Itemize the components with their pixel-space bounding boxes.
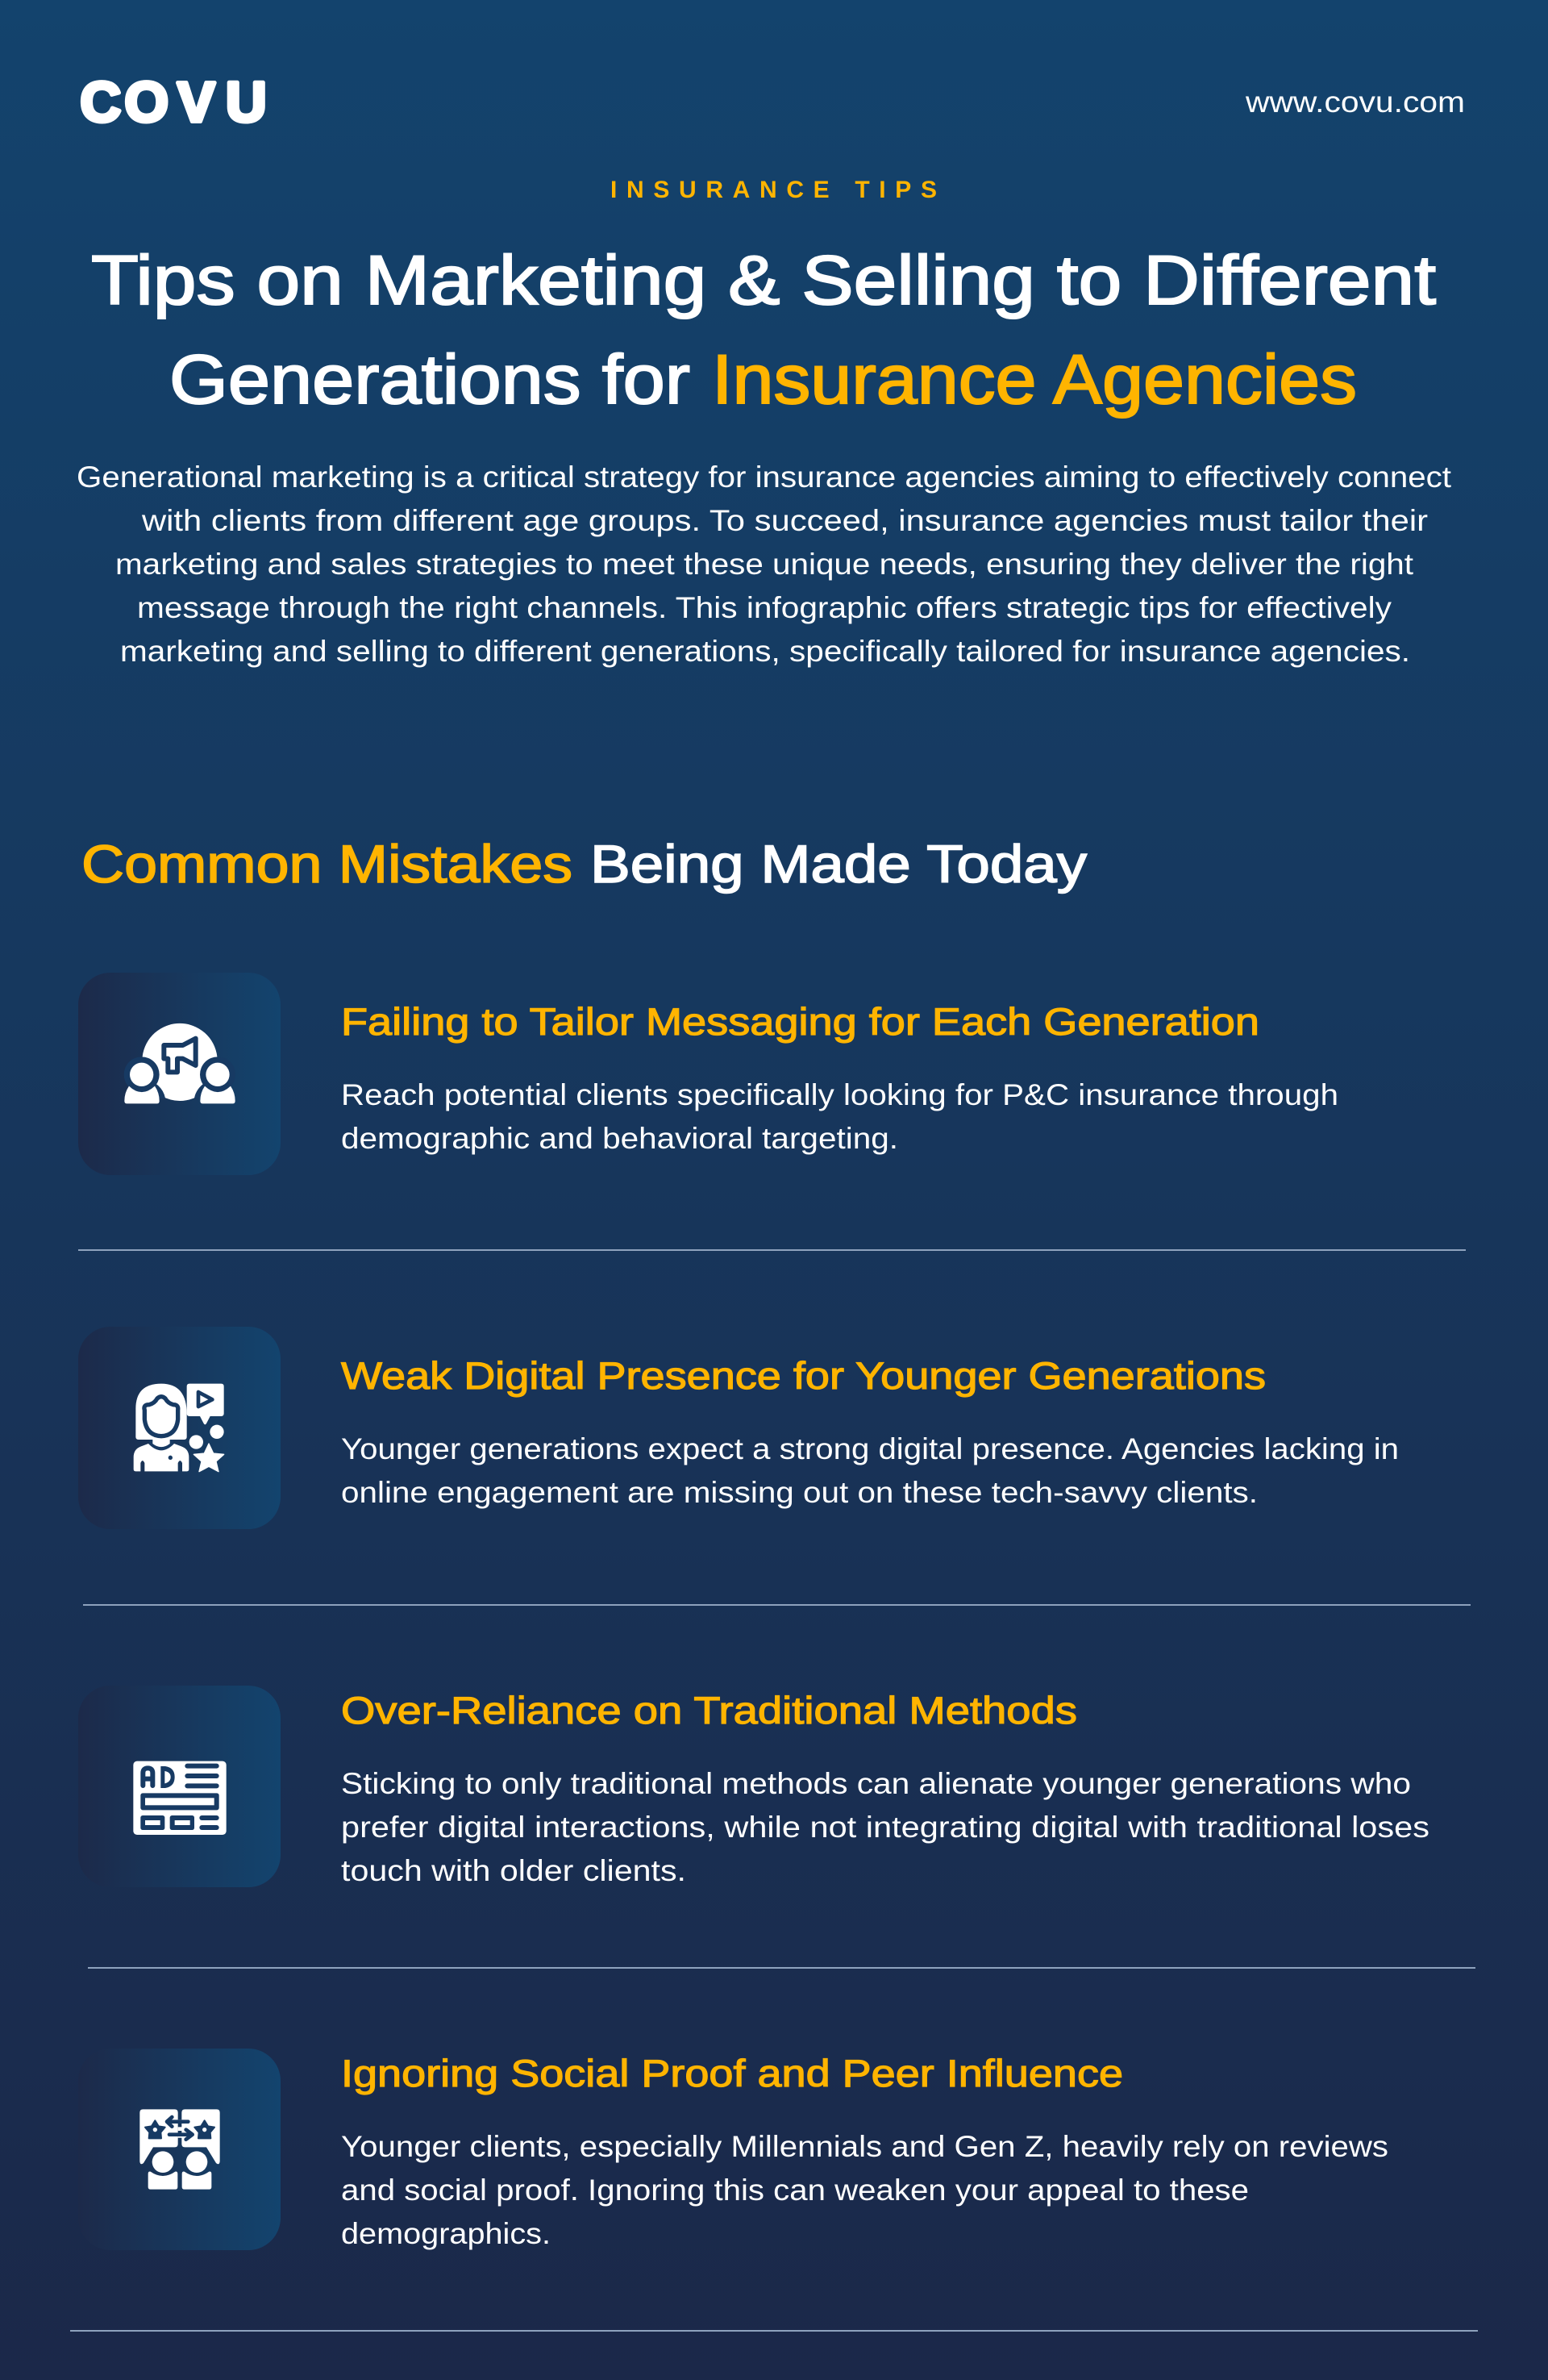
description: Younger generations expect a strong digital presence. Agencies lacking in [341,1432,1399,1465]
website url: www.covu.com [1245,85,1465,119]
kicker: insurance tips: INSURANCE TIPS [610,177,937,203]
panel: mistake 3 [78,1686,1429,1887]
title: Generations for [169,341,690,419]
description: online engagement are missing out on these tech-savvy clients. [341,1476,1258,1509]
intro paragraph: Generational marketing is a critical strategy for insurance agencies aiming to effectively connect [77,461,1452,494]
logo: COVU: COVU [81,71,267,134]
title [91,242,1436,419]
panel: mistake 2 [78,1327,1399,1529]
description: prefer digital interactions, while not integrating digital with traditional loses [341,1811,1429,1844]
description: touch with older clients. [341,1854,686,1887]
intro paragraph: message through the right channels. This infographic offers strategic tips for effectively [137,591,1392,624]
heading: Failing to Tailor Messaging for Each Generation [341,1000,1259,1043]
heading: Over-Reliance on Traditional Methods [341,1689,1077,1732]
title: Insurance Agencies [712,341,1357,419]
description: and social proof. Ignoring this can weaken your appeal to these [341,2174,1249,2207]
title: Tips on Marketing & Selling to Different [91,242,1436,319]
intro paragraph [77,461,1452,668]
description [341,1078,1338,1155]
section heading: Being Made Today [590,834,1087,894]
intro paragraph: marketing and sales strategies to meet these unique needs, ensuring they deliver the right [115,548,1414,581]
description: Sticking to only traditional methods can alienate younger generations who [341,1767,1411,1800]
panel: mistake 1 [78,973,1338,1175]
description: Reach potential clients specifically looking for P&C insurance through [341,1078,1338,1111]
intro paragraph: marketing and selling to different generations, specifically tailored for insurance agencies. [120,635,1410,668]
icon: ad layout [78,1686,281,1887]
panel: mistake 4 [78,2049,1388,2250]
icon: audience and megaphone [78,973,281,1175]
heading: Ignoring Social Proof and Peer Influence [341,2052,1123,2094]
description: Younger clients, especially Millennials and Gen Z, heavily rely on reviews [341,2130,1388,2163]
intro paragraph: with clients from different age groups. To succeed, insurance agencies must tailor their [141,504,1428,537]
description: demographic and behavioral targeting. [341,1122,898,1155]
description [341,1432,1399,1509]
icon: peer reviews [78,2049,281,2250]
heading: Weak Digital Presence for Younger Generations [341,1354,1266,1397]
section heading [81,834,1087,894]
description: demographics. [341,2217,551,2250]
section heading: Common Mistakes [81,834,572,894]
description [341,1767,1429,1887]
description [341,2130,1388,2250]
icon: woman with video and star [78,1327,281,1529]
